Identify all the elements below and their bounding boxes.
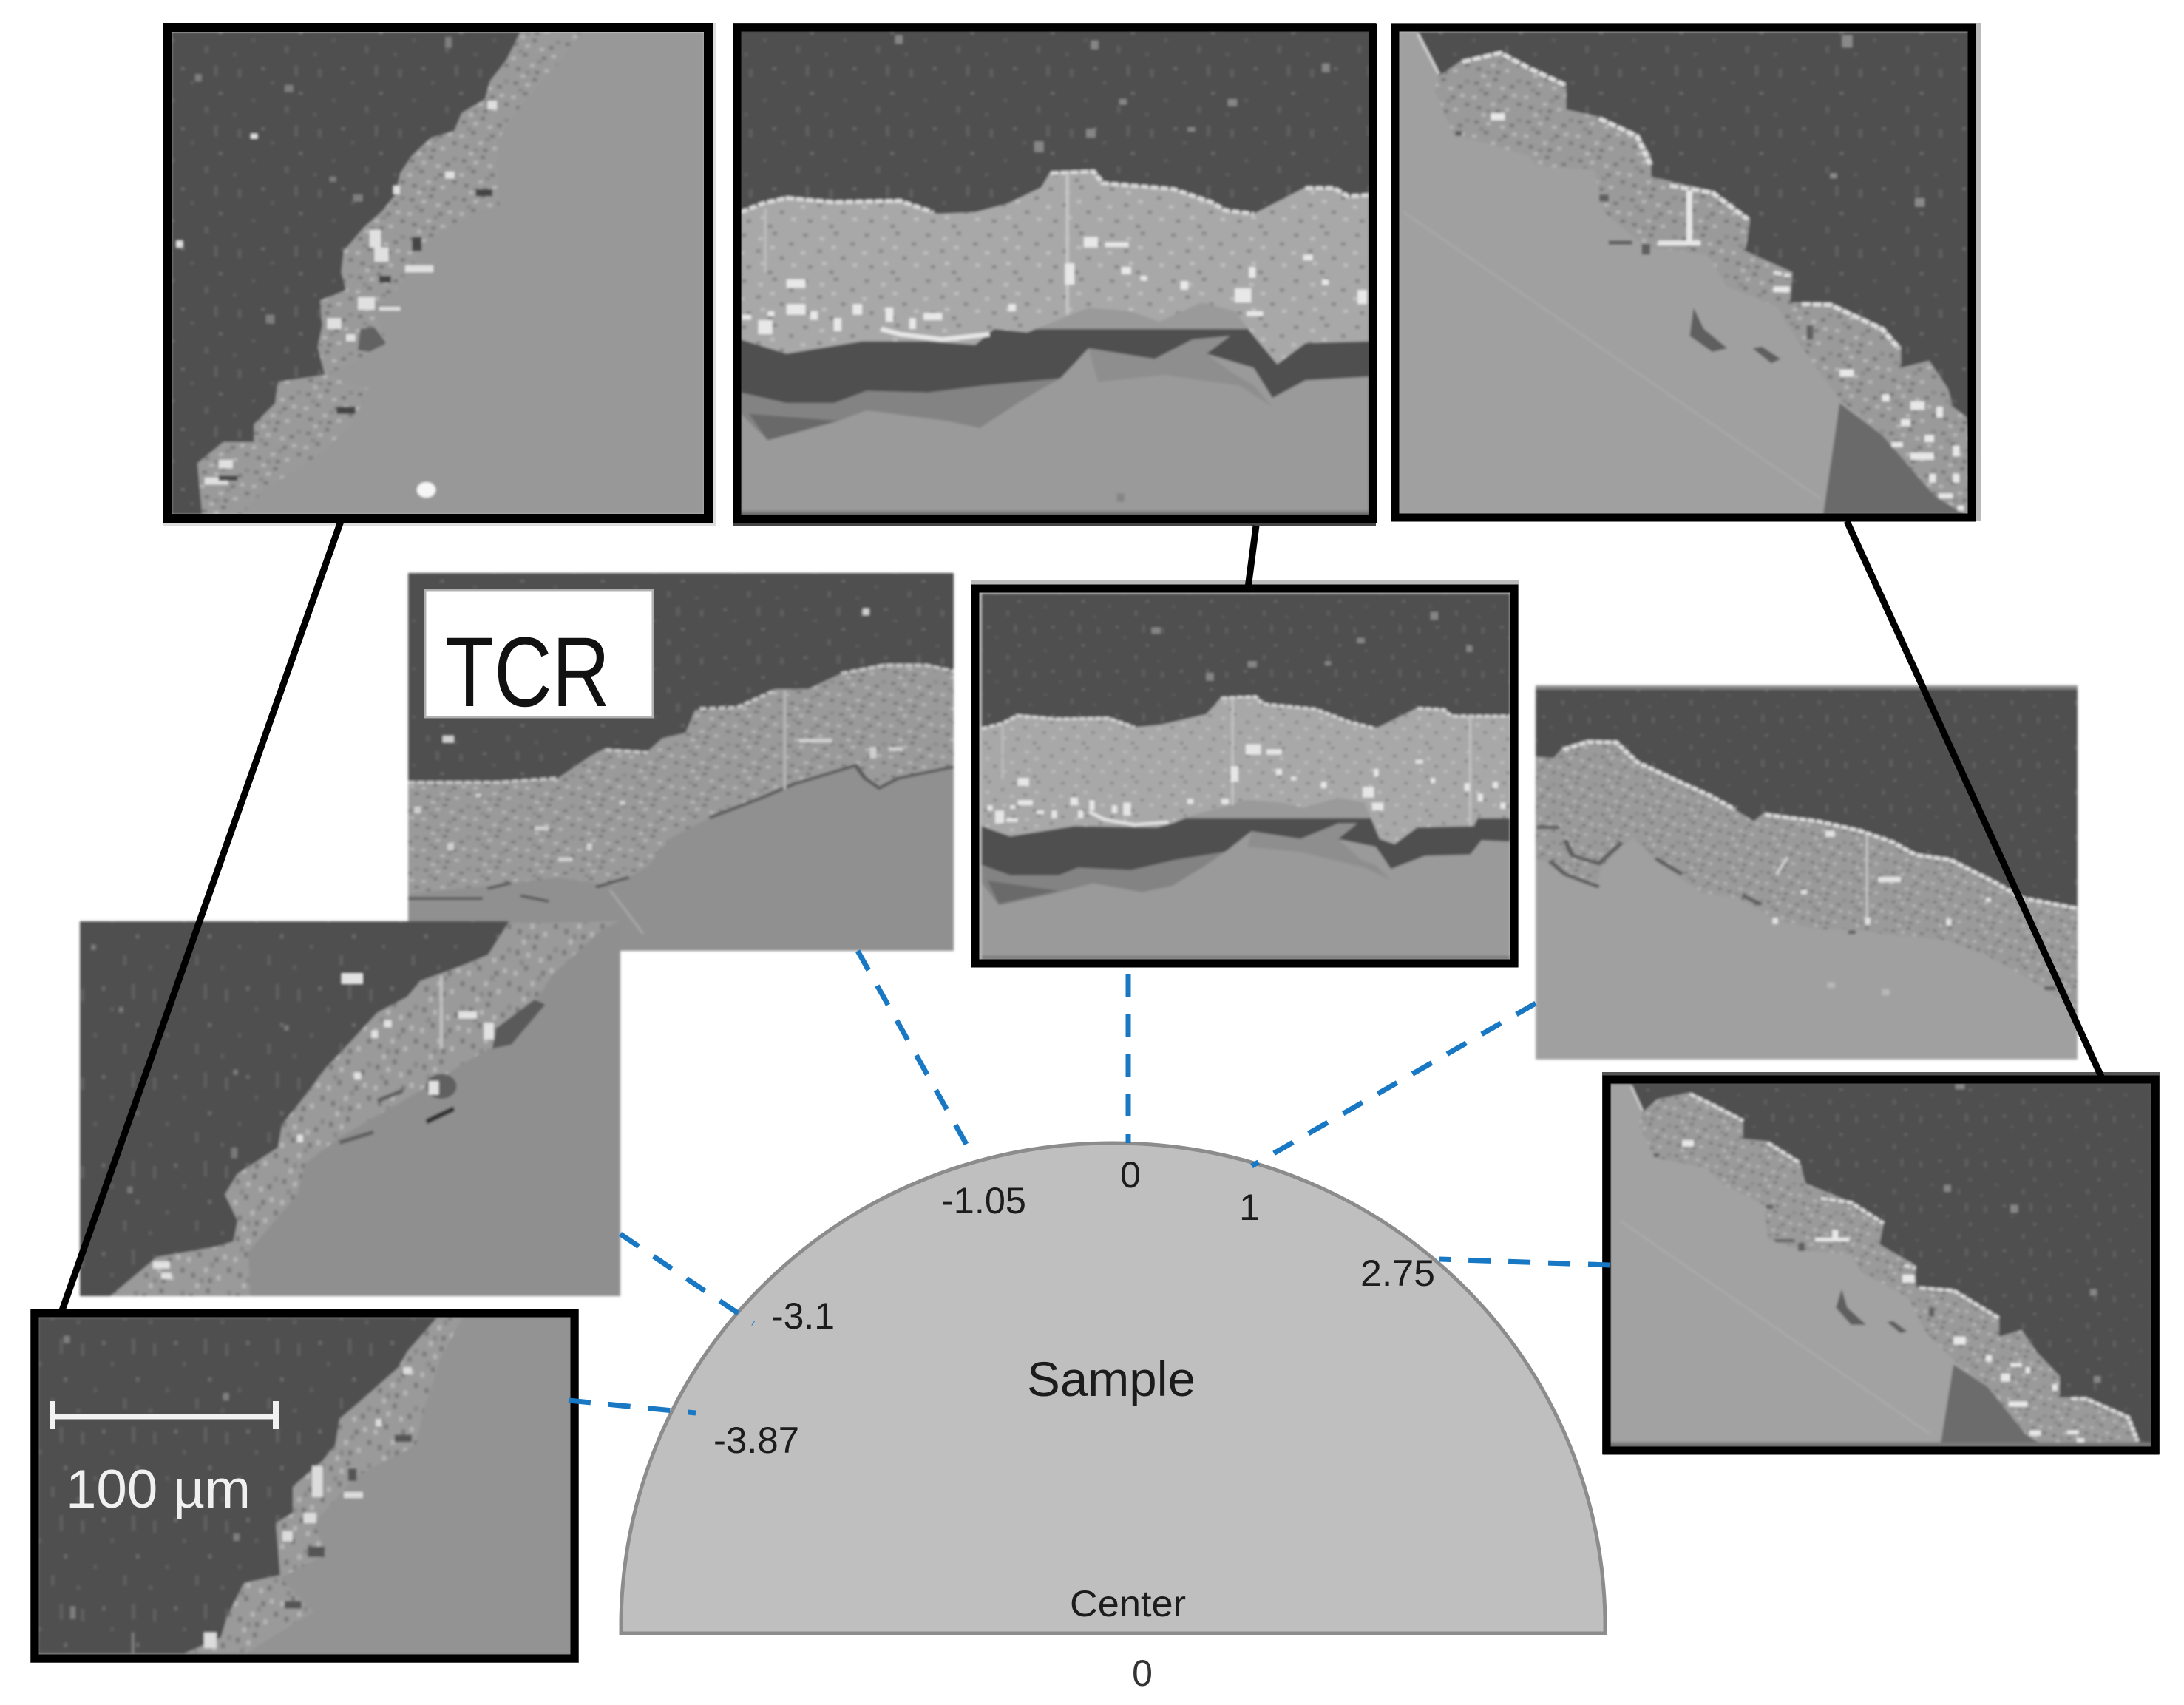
sample labels: [713, 1154, 1435, 1694]
panel: micrograph top right: [1391, 23, 1981, 521]
sample labels: Center: [1070, 1583, 1186, 1624]
panel: micrograph top center: [733, 23, 1376, 526]
panel: micrograph at -3.1: [80, 921, 620, 1296]
sample labels: 2.75: [1360, 1253, 1435, 1294]
sample labels: -3.1: [771, 1295, 835, 1337]
label: TCR: TCR: [445, 617, 610, 728]
panel: micrograph at -3.87 with scale bar: [30, 1309, 579, 1663]
sample labels: 0: [1132, 1653, 1153, 1694]
panel: micrograph at 1: [1536, 685, 2078, 1060]
scale bar: [52, 1401, 276, 1429]
sample labels: -3.87: [713, 1420, 799, 1461]
dashed position leaders: [569, 951, 1610, 1413]
diagram: semicircular sample: [621, 1143, 1605, 1633]
sample labels: 0: [1120, 1154, 1141, 1196]
sample labels: -1.05: [941, 1180, 1026, 1221]
sample labels: 1: [1239, 1187, 1260, 1228]
panel: micrograph top left: [163, 23, 716, 526]
panel: micrograph at 2.75: [1602, 1072, 2160, 1454]
panel: TCR micrograph: [408, 573, 954, 951]
scale bar label: 100 µm: [66, 1460, 251, 1519]
connector lines: [61, 521, 2102, 1312]
panel: central micrograph at 0: [971, 580, 1519, 967]
sample labels: Sample: [1027, 1352, 1196, 1406]
